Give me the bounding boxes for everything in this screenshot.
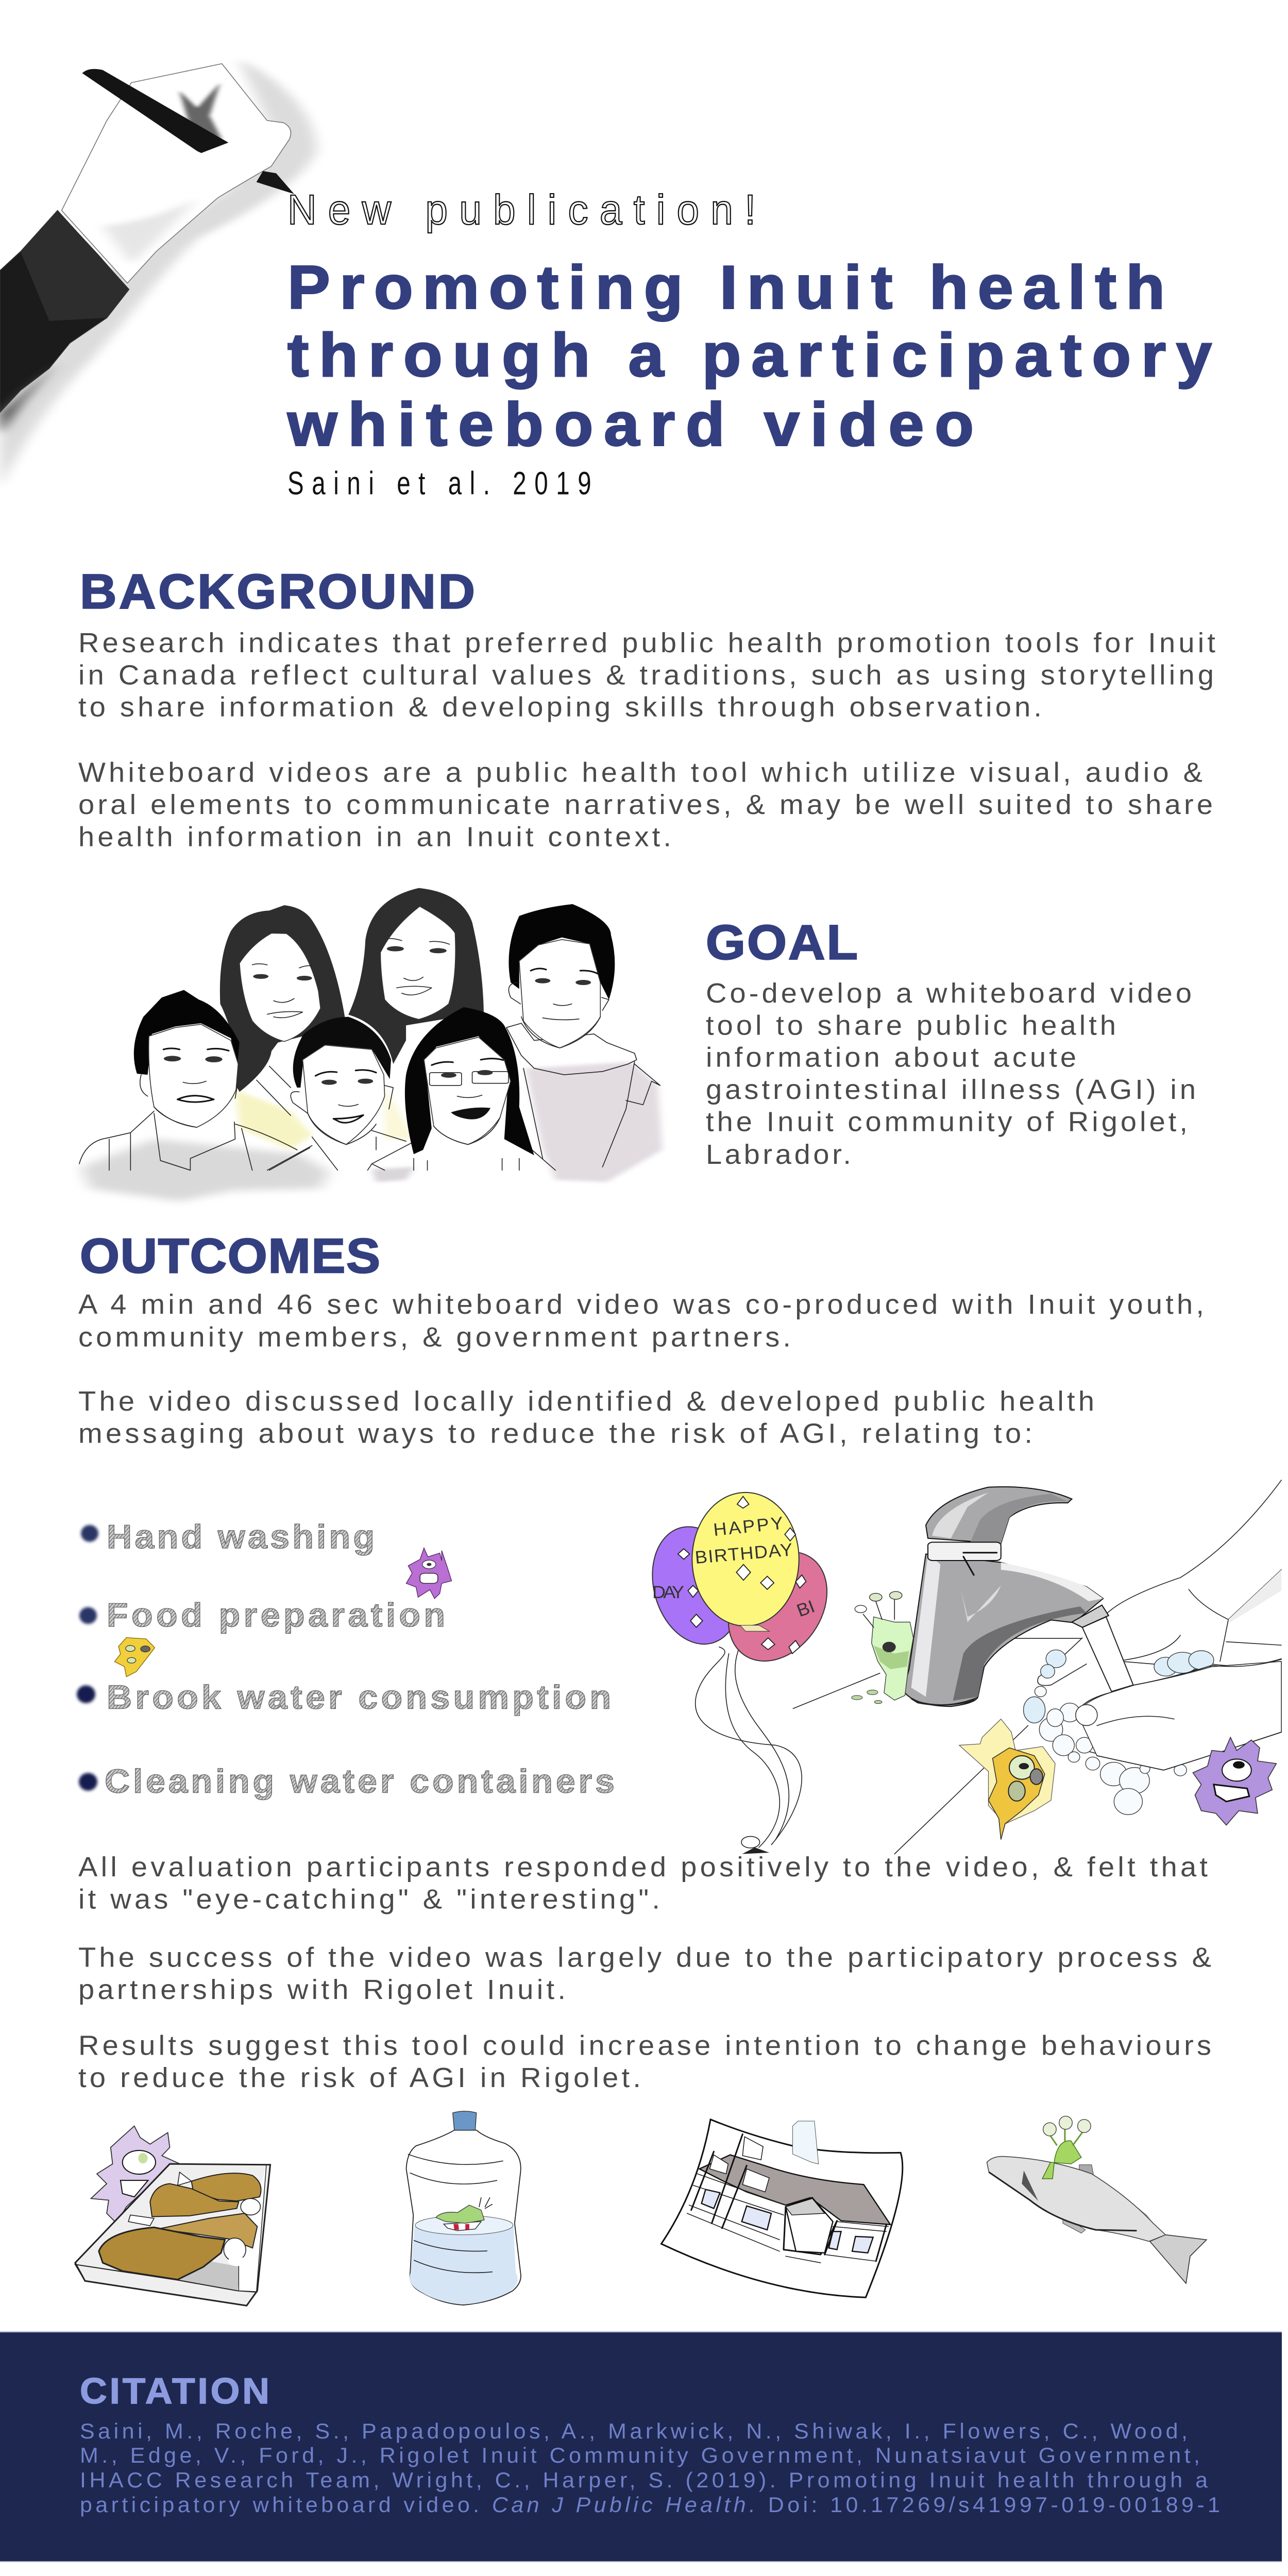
title: Promoting Inuit health [287, 253, 1165, 321]
text block: goal: gastrointestinal illness (AGI) in [706, 1074, 1196, 1105]
illustration: photo of house taped up [661, 2120, 903, 2297]
title: whiteboard video [287, 390, 974, 459]
illustration: birthday balloons: BIRTHDAY [694, 1540, 793, 1568]
person: woman with long hair, centre [348, 888, 484, 1064]
illustration: birthday balloons: BI [794, 1597, 818, 1621]
text block: evaluation results [78, 1851, 1211, 2093]
faucet [903, 1487, 1109, 1706]
text block: evaluation results: The success of the video was largely due to the participatory process & [78, 1942, 1211, 1973]
text block: goal [706, 977, 1196, 1170]
balloon strings [696, 1630, 802, 1848]
text block: background: oral elements to communicate narratives, & may be well suited to share [78, 789, 1213, 820]
purple balloon [643, 1524, 749, 1647]
illustration: five community members [79, 888, 662, 1201]
purple germ [1193, 1737, 1276, 1825]
counter line [793, 1638, 1082, 1854]
text block: goal: tool to share public health [706, 1009, 1116, 1041]
illustration: germ on raw chicken tray [75, 2126, 270, 2306]
text block: evaluation results: to reduce the risk of AGI in Rigolet. [78, 2062, 641, 2093]
text block: outcomes intro: The video discussed locally identified & developed public health [78, 1385, 1094, 1417]
title [287, 253, 1212, 459]
citation text: Saini, M., Roche, S., Papadopoulos, A., Markwick, N., Shiwak, I., Flowers, C., Wood, [80, 2419, 1188, 2443]
bullet: brook water consumption: Brook water consumption [107, 1679, 611, 1716]
text block: evaluation results: All evaluation participants responded positively to the video, & felt that [78, 1851, 1208, 1883]
citation text: IHACC Research Team, Wright, C., Harper, S. (2019). Promoting Inuit health through a [80, 2468, 1208, 2492]
citation text: M., Edge, V., Ford, J., Rigolet Inuit Community Government, Nunatsiavut Government, [80, 2444, 1200, 2467]
heading: background: BACKGROUND [80, 564, 475, 619]
yellow balloon [692, 1493, 799, 1626]
illustration: hands washing under a faucet [793, 1480, 1281, 1854]
illustration: birthday balloons: HAPPY [713, 1513, 784, 1540]
text block: outcomes intro: A 4 min and 46 sec whiteboard video was co-produced with Inuit youth, [78, 1289, 1204, 1320]
water stream [1082, 1617, 1133, 1691]
text block: goal: Co-develop a whiteboard video [706, 977, 1192, 1009]
text block: background: Whiteboard videos are a public health tool which utilize visual, audio & [78, 756, 1202, 788]
green germ behind faucet [852, 1591, 913, 1704]
text block: outcomes intro: messaging about ways to reduce the risk of AGI, relating to: [78, 1418, 1032, 1449]
title: through a participatory [287, 320, 1212, 389]
text block: background: Research indicates that preferred public health promotion tools for Inuit [78, 627, 1215, 658]
illustration: birthday balloons: DAY [652, 1583, 684, 1602]
panel: citation [0, 2332, 1282, 2562]
icon: small purple germ [406, 1548, 451, 1599]
illustration: hand drawing with a pen [0, 59, 316, 488]
fingers over suds [1076, 1662, 1281, 1770]
text block: background: health information in an Inuit context. [78, 821, 671, 852]
bullet: food preparation: Food preparation [107, 1597, 445, 1634]
heading: outcomes: OUTCOMES [80, 1228, 380, 1283]
pink balloon [714, 1546, 842, 1667]
author line: Saini et al. 2019 [287, 465, 591, 501]
bullet: cleaning water containers: Cleaning water containers [105, 1763, 615, 1800]
illustration: water jug with germ [406, 2111, 521, 2305]
heading: citation: CITATION [80, 2371, 269, 2411]
bullet: hand washing: Hand washing [107, 1518, 375, 1556]
person: woman with long hair, left [220, 905, 346, 1115]
bullet list: messaging topics [77, 1518, 615, 1800]
person: young woman with glasses [367, 1007, 555, 1170]
person: boy, centre [269, 1017, 406, 1170]
citation text: participatory whiteboard video. Can J Public Health. Doi: 10.17269/s41997-019-00189-1 [80, 2493, 1220, 2517]
text block: evaluation results: Results suggest this tool could increase intention to change behaviours [78, 2030, 1211, 2061]
kicker: New publication!: New publication! [287, 187, 756, 233]
text block: background: to share information & developing skills through observation. [78, 691, 1042, 722]
text block: outcomes intro [78, 1289, 1204, 1449]
heading: goal: GOAL [706, 914, 858, 970]
text block: background: in Canada reflect cultural values & traditions, such as using storytelling [78, 659, 1214, 690]
text block: evaluation results: partnerships with Rigolet Inuit. [78, 1974, 566, 2005]
text block: goal: information about acute [706, 1042, 1076, 1073]
clothing shading [81, 1062, 662, 1201]
citation text [80, 2419, 1220, 2517]
arm and hand outlines [1028, 1480, 1281, 1770]
person: young man in a hoodie, right [506, 904, 660, 1167]
text block: outcomes intro: community members, & government partners. [78, 1321, 791, 1352]
person: boy in a collared shirt, left [79, 990, 312, 1170]
illustration: germ riding a dead fish [987, 2116, 1207, 2283]
text block: goal: Labrador. [706, 1139, 851, 1170]
soap suds [1024, 1650, 1214, 1815]
icon: small yellow germ [114, 1638, 155, 1677]
text block: background [78, 627, 1215, 852]
text block: evaluation results: it was "eye-catching" & "interesting". [78, 1883, 660, 1914]
text block: goal: the Inuit community of Rigolet, [706, 1106, 1188, 1137]
yellow germ [959, 1719, 1055, 1840]
illustration: birthday balloons [643, 1493, 842, 1854]
